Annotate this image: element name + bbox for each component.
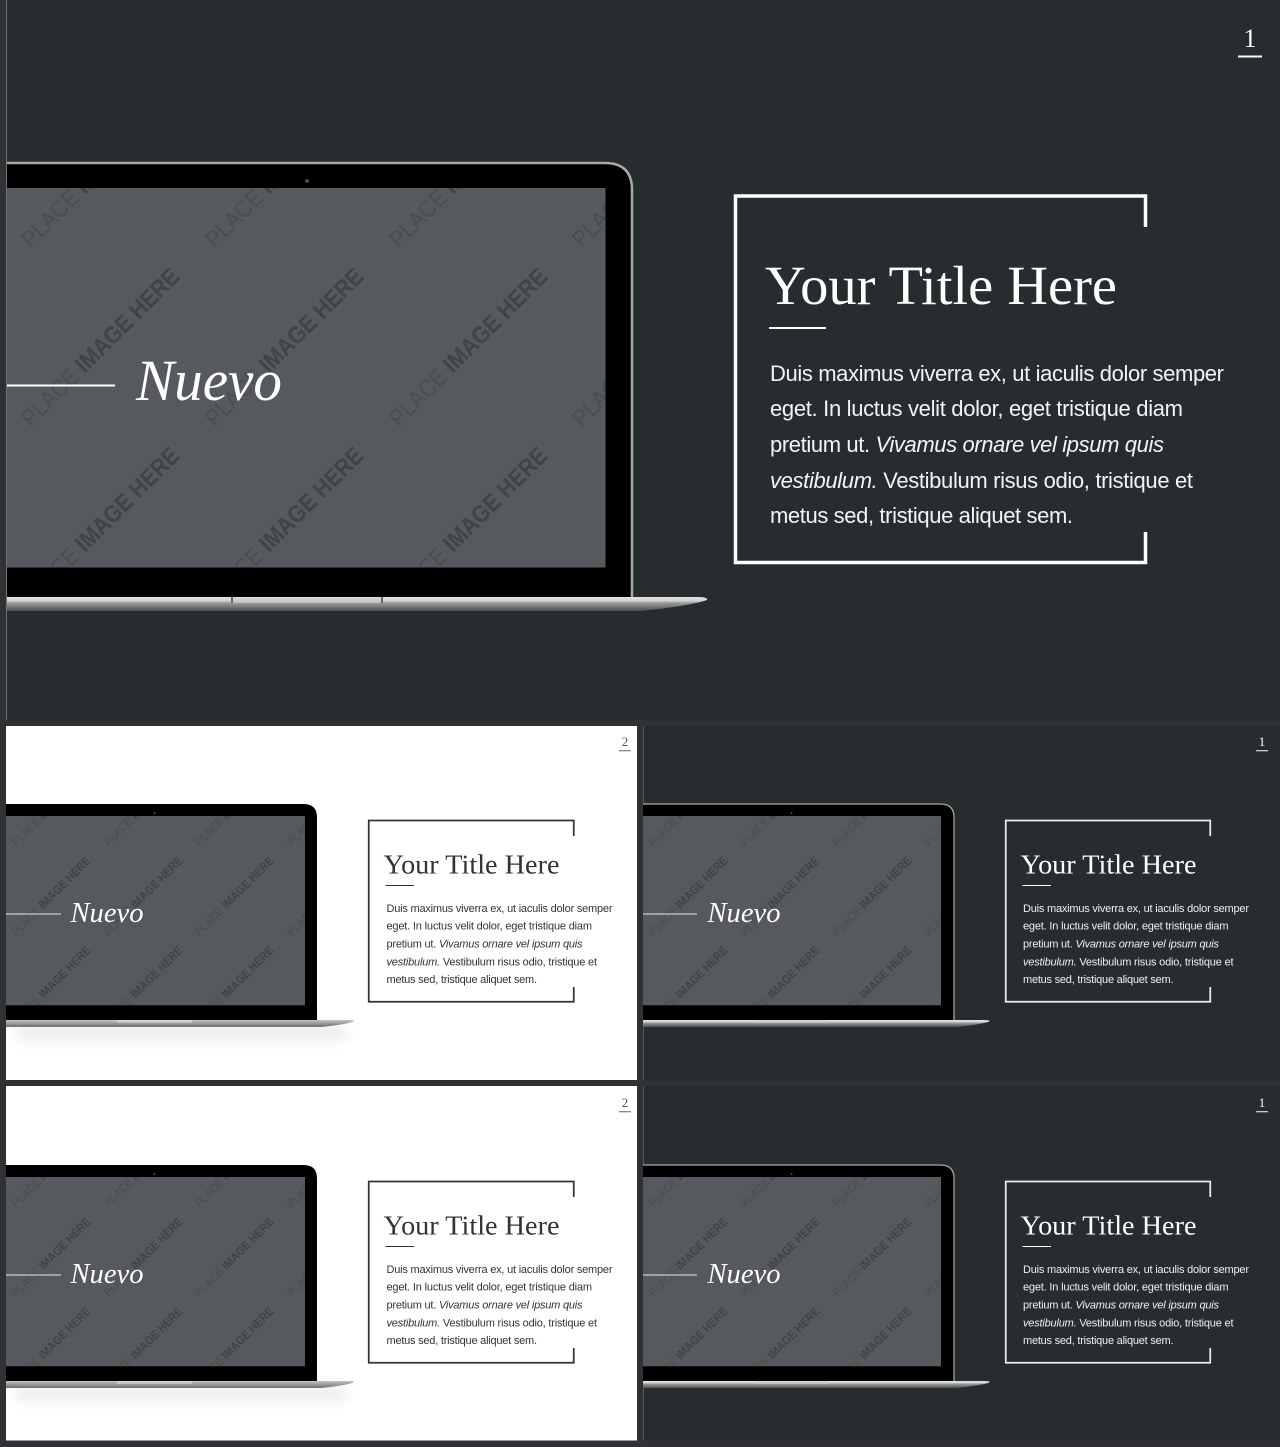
screen watermark placeholders: PLACE IMAGE HERE: [384, 84, 553, 253]
screen watermark placeholders: PLACE IMAGE HERE: [567, 263, 736, 432]
panel: small white slide 2, row 1: [1, 726, 637, 1080]
page number 1: [1256, 734, 1268, 751]
text frame with title and body: Duis maximus viverra ex, ut iaculis dolor semper: [770, 361, 1224, 386]
screen watermark placeholders: [21, 188, 606, 568]
screen watermark placeholders: PLACE IMAGE HERE: [16, 84, 185, 253]
screen watermark placeholders: PLACE IMAGE HERE: [101, 854, 186, 939]
panel: small dark slide 1, row 1: [638, 726, 1280, 1080]
screen watermark placeholders: PLACE IMAGE HERE: [16, 442, 185, 611]
screen watermark placeholders: PLACE IMAGE HERE: [738, 764, 823, 849]
screen watermark placeholders: [12, 816, 305, 1006]
screen watermark placeholders: PLACE IMAGE HERE: [646, 1304, 731, 1389]
screen watermark placeholders: PLACE IMAGE HERE: [921, 1215, 1006, 1300]
text frame with title and body: vestibulum. Vestibulum risus odio, tristique et: [1023, 956, 1234, 968]
screen watermark placeholders: PLACE IMAGE HERE: [200, 84, 369, 253]
text frame with title and body: [1006, 1182, 1249, 1363]
text frame with title and body: vestibulum. Vestibulum risus odio, tristique et: [1023, 1318, 1234, 1330]
text frame with title and body: Your Title Here: [1020, 1209, 1196, 1240]
text frame with title and body: Duis maximus viverra ex, ut iaculis dolor semper: [386, 903, 613, 915]
text frame with title and body: pretium ut. Vivamus ornare vel ipsum quis: [1023, 1300, 1220, 1312]
screen watermark placeholders: PLACE IMAGE HERE: [830, 1125, 915, 1210]
screen watermark placeholders: PLACE IMAGE HERE: [830, 764, 915, 849]
screen watermark placeholders: PLACE IMAGE HERE: [101, 1215, 186, 1300]
text frame with title and body: metus sed, tristique aliquet sem.: [386, 974, 537, 986]
text frame with title and body: Duis maximus viverra ex, ut iaculis dolor semper: [386, 1264, 613, 1276]
screen watermark placeholders: PLACE IMAGE HERE: [101, 943, 186, 1028]
screen watermark placeholders: PLACE IMAGE HERE: [9, 1304, 94, 1389]
screen watermark placeholders: PLACE IMAGE HERE: [200, 263, 369, 432]
screen watermark placeholders: PLACE IMAGE HERE: [284, 1125, 369, 1210]
screen watermark placeholders: PLACE IMAGE HERE: [9, 1215, 94, 1300]
text frame with title and body: [369, 1182, 613, 1363]
text frame with title and body: [369, 820, 613, 1002]
panel: small white slide 2, row 2: [1, 1086, 637, 1440]
text frame with title and body: eget. In luctus velit dolor, eget tristique diam: [386, 1282, 592, 1294]
text frame with title and body: eget. In luctus velit dolor, eget tristique diam: [386, 920, 592, 932]
screen watermark placeholders: PLACE IMAGE HERE: [192, 1304, 277, 1389]
text frame with title and body: [736, 196, 1224, 562]
screen watermark placeholders: PLACE IMAGE HERE: [192, 1125, 277, 1210]
screen watermark placeholders: PLACE IMAGE HERE: [9, 854, 94, 939]
text frame with title and body: metus sed, tristique aliquet sem.: [386, 1335, 537, 1347]
text frame with title and body: eget. In luctus velit dolor, eget tristique diam: [770, 396, 1183, 421]
screen watermark placeholders: PLACE IMAGE HERE: [646, 1215, 731, 1300]
screen label: Nuevo: Nuevo: [135, 348, 282, 413]
page number 2: 2: [622, 1095, 628, 1110]
text frame with title and body: eget. In luctus velit dolor, eget tristique diam: [1023, 1282, 1228, 1294]
screen watermark placeholders: PLACE IMAGE HERE: [646, 764, 731, 849]
screen watermark placeholders: PLACE IMAGE HERE: [738, 1215, 823, 1300]
screen watermark placeholders: PLACE IMAGE HERE: [101, 1304, 186, 1389]
screen watermark placeholders: PLACE IMAGE HERE: [738, 1125, 823, 1210]
page number 1: 1: [1244, 24, 1256, 53]
text frame with title and body: [1006, 820, 1249, 1002]
screen watermark placeholders: PLACE IMAGE HERE: [830, 943, 915, 1028]
screen label: Nuevo: Nuevo: [707, 1258, 780, 1290]
screen watermark placeholders: PLACE IMAGE HERE: [738, 943, 823, 1028]
screen watermark placeholders: [648, 1177, 941, 1366]
text frame with title and body: Duis maximus viverra ex, ut iaculis dolor semper: [1023, 1264, 1249, 1276]
text frame with title and body: pretium ut. Vivamus ornare vel ipsum quis: [386, 938, 583, 950]
text frame with title and body: pretium ut. Vivamus ornare vel ipsum quis: [770, 432, 1164, 457]
page number 1: [1238, 24, 1262, 58]
screen watermark placeholders: PLACE IMAGE HERE: [830, 1304, 915, 1389]
screen watermark placeholders: PLACE IMAGE HERE: [284, 764, 369, 849]
text frame with title and body: Your Title Here: [384, 1209, 560, 1240]
text frame with title and body: metus sed, tristique aliquet sem.: [770, 503, 1073, 528]
page number 2: 2: [622, 734, 628, 749]
screen watermark placeholders: [12, 1177, 305, 1366]
screen watermark placeholders: PLACE IMAGE HERE: [9, 943, 94, 1028]
screen watermark placeholders: PLACE IMAGE HERE: [284, 1215, 369, 1300]
screen watermark placeholders: PLACE IMAGE HERE: [192, 943, 277, 1028]
page number 1: 1: [1259, 1095, 1265, 1110]
screen watermark placeholders: PLACE IMAGE HERE: [830, 1215, 915, 1300]
screen watermark placeholders: PLACE IMAGE HERE: [192, 1215, 277, 1300]
screen watermark placeholders: PLACE IMAGE HERE: [921, 764, 1006, 849]
screen watermark placeholders: PLACE IMAGE HERE: [646, 1125, 731, 1210]
text frame with title and body: pretium ut. Vivamus ornare vel ipsum quis: [1023, 938, 1220, 950]
laptop mockup: [643, 1164, 990, 1388]
page number 2: [619, 1095, 631, 1112]
screen watermark placeholders: PLACE IMAGE HERE: [738, 1304, 823, 1389]
screen watermark placeholders: PLACE IMAGE HERE: [646, 943, 731, 1028]
text frame with title and body: Your Title Here: [384, 848, 560, 879]
panel: large dark slide 1: [0, 0, 1280, 720]
screen watermark placeholders: PLACE IMAGE HERE: [192, 764, 277, 849]
screen watermark placeholders: [648, 816, 941, 1006]
screen watermark placeholders: PLACE IMAGE HERE: [284, 854, 369, 939]
text frame with title and body: metus sed, tristique aliquet sem.: [1023, 974, 1174, 986]
laptop mockup: [643, 803, 990, 1027]
text frame with title and body: eget. In luctus velit dolor, eget tristique diam: [1023, 920, 1228, 932]
screen label: Nuevo: Nuevo: [70, 897, 144, 929]
screen watermark placeholders: PLACE IMAGE HERE: [921, 854, 1006, 939]
laptop mockup: [6, 1165, 354, 1402]
panel: small dark slide 1, row 2: [638, 1086, 1280, 1440]
text frame with title and body: metus sed, tristique aliquet sem.: [1023, 1335, 1174, 1347]
laptop mockup: [7, 162, 708, 611]
text frame with title and body: vestibulum. Vestibulum risus odio, tristique et: [386, 1318, 597, 1330]
text frame with title and body: Your Title Here: [1020, 848, 1196, 879]
text frame with title and body: Duis maximus viverra ex, ut iaculis dolor semper: [1023, 903, 1249, 915]
screen watermark placeholders: PLACE IMAGE HERE: [101, 764, 186, 849]
screen watermark placeholders: PLACE IMAGE HERE: [192, 854, 277, 939]
page number 1: [1256, 1095, 1268, 1112]
page number 2: [619, 734, 631, 751]
screen watermark placeholders: PLACE IMAGE HERE: [9, 1125, 94, 1210]
text frame with title and body: Your Title Here: [765, 255, 1117, 316]
text frame with title and body: vestibulum. Vestibulum risus odio, tristique et: [770, 468, 1193, 493]
screen watermark placeholders: PLACE IMAGE HERE: [646, 854, 731, 939]
text frame with title and body: vestibulum. Vestibulum risus odio, tristique et: [386, 956, 597, 968]
screen watermark placeholders: PLACE IMAGE HERE: [16, 263, 185, 432]
screen watermark placeholders: PLACE IMAGE HERE: [200, 442, 369, 611]
screen watermark placeholders: PLACE IMAGE HERE: [384, 442, 553, 611]
screen label: Nuevo: Nuevo: [70, 1258, 144, 1290]
text frame with title and body: pretium ut. Vivamus ornare vel ipsum quis: [386, 1300, 583, 1312]
screen watermark placeholders: PLACE IMAGE HERE: [9, 764, 94, 849]
screen label: Nuevo: Nuevo: [707, 897, 780, 929]
screen watermark placeholders: PLACE IMAGE HERE: [738, 854, 823, 939]
laptop mockup: [6, 804, 354, 1041]
screen watermark placeholders: PLACE IMAGE HERE: [567, 84, 736, 253]
screen watermark placeholders: PLACE IMAGE HERE: [384, 263, 553, 432]
screen watermark placeholders: PLACE IMAGE HERE: [101, 1125, 186, 1210]
page number 1: 1: [1259, 734, 1265, 749]
screen watermark placeholders: PLACE IMAGE HERE: [921, 1125, 1006, 1210]
screen watermark placeholders: PLACE IMAGE HERE: [830, 854, 915, 939]
